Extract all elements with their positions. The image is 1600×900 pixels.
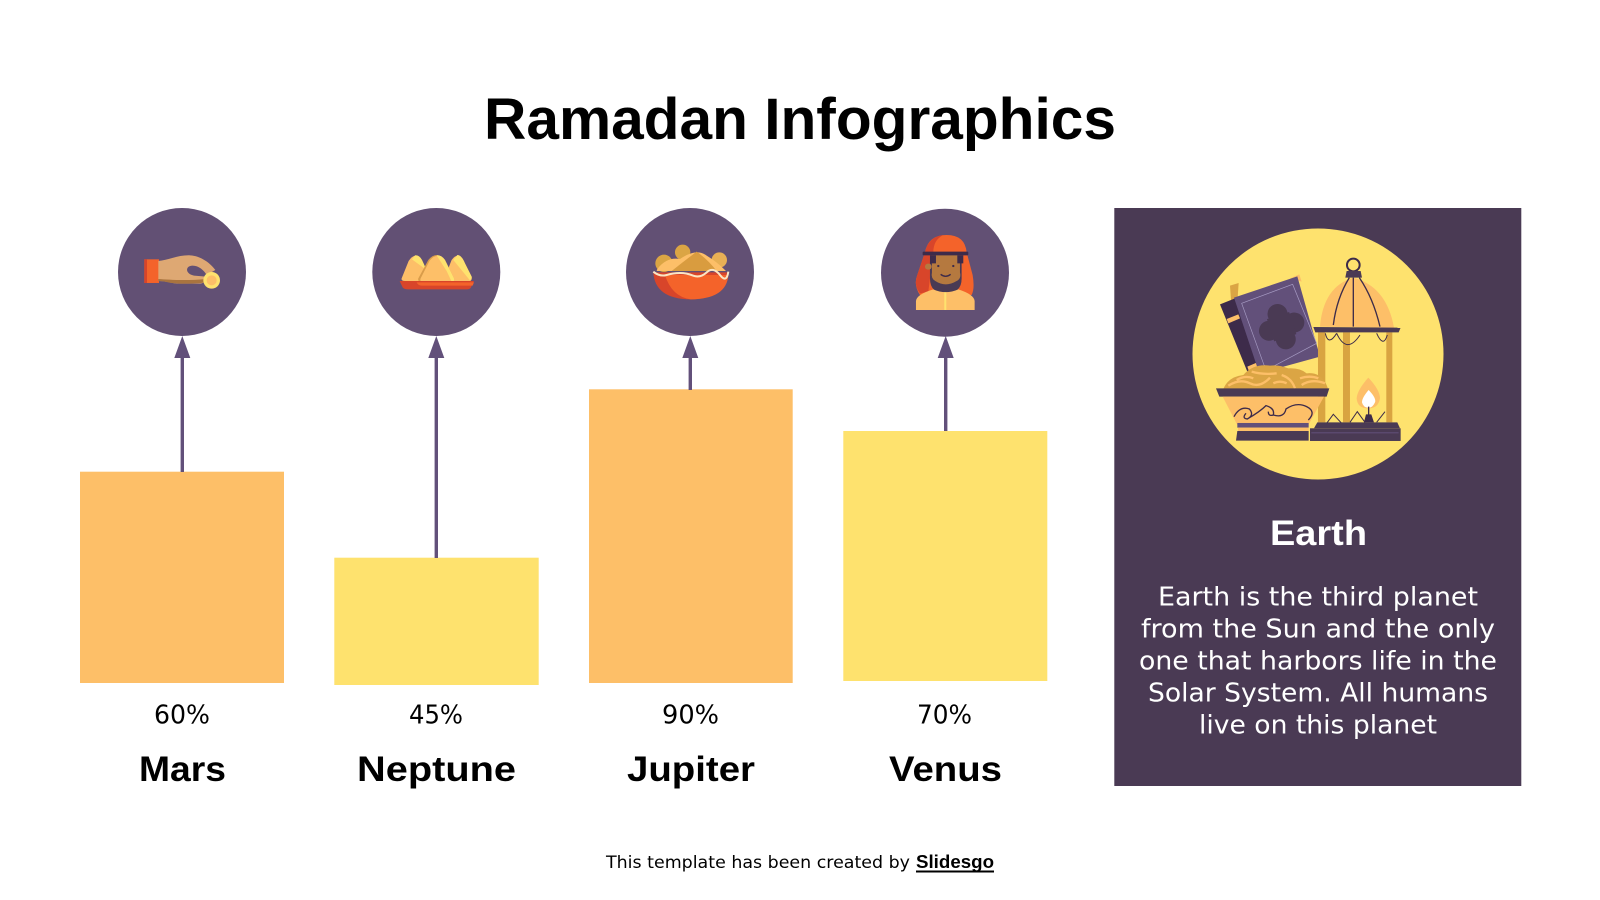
icon circle: Mars: [118, 208, 246, 336]
bar: Mars: [80, 472, 284, 683]
arrow: Neptune: [428, 336, 444, 558]
value: Mars: 60%: [154, 700, 210, 730]
arrow: Venus: [938, 336, 954, 431]
panel text: Solar System. All humans: [1148, 678, 1488, 708]
icon: lantern: [1310, 259, 1401, 441]
icon: book: [1220, 274, 1320, 373]
bar: Jupiter: [589, 389, 793, 683]
icon circle: Jupiter: [626, 208, 754, 336]
icon: bowl of food: [653, 245, 728, 299]
label: Neptune: Neptune: [357, 750, 516, 789]
column: Venus: [843, 209, 1047, 789]
label: Jupiter: Jupiter: [627, 750, 755, 789]
icon circle: Venus: [881, 209, 1009, 337]
illustration: book, lantern and bowl: [1216, 259, 1401, 441]
column: Neptune: [334, 208, 539, 789]
label: Venus: Venus: [889, 750, 1002, 789]
icon: hand with coin: [144, 255, 220, 289]
value: Venus: 70%: [917, 700, 972, 730]
footer credit: This template has been created by: [605, 853, 910, 873]
panel background: [1114, 208, 1521, 786]
bar: Venus: [843, 431, 1047, 681]
panel: Earth: [1114, 208, 1521, 786]
value: Jupiter: 90%: [662, 700, 719, 730]
icon: man in headscarf: [916, 235, 975, 310]
panel text: Earth is the third planet: [1158, 583, 1478, 613]
illustration circle: [1192, 228, 1444, 480]
arrow: Mars: [174, 336, 190, 472]
label: Mars: Mars: [139, 750, 226, 789]
panel text: one that harbors life in the: [1139, 646, 1497, 676]
footer credit: Slidesgo: [916, 852, 994, 872]
panel text: from the Sun and the only: [1141, 614, 1495, 644]
column: Mars: [80, 208, 284, 789]
icon: samosas on a plate: [400, 255, 474, 289]
panel text: live on this planet: [1199, 710, 1437, 740]
icon: bowl of nuts: [1216, 365, 1329, 441]
panel text: [1139, 583, 1497, 740]
column: Jupiter: [589, 208, 793, 789]
icon circle: Neptune: [372, 208, 500, 336]
bar: Neptune: [334, 558, 539, 685]
panel heading: Earth: [1270, 514, 1367, 553]
arrow: Jupiter: [682, 336, 698, 390]
title: Ramadan Infographics: [484, 87, 1116, 152]
value: Neptune: 45%: [409, 700, 463, 730]
